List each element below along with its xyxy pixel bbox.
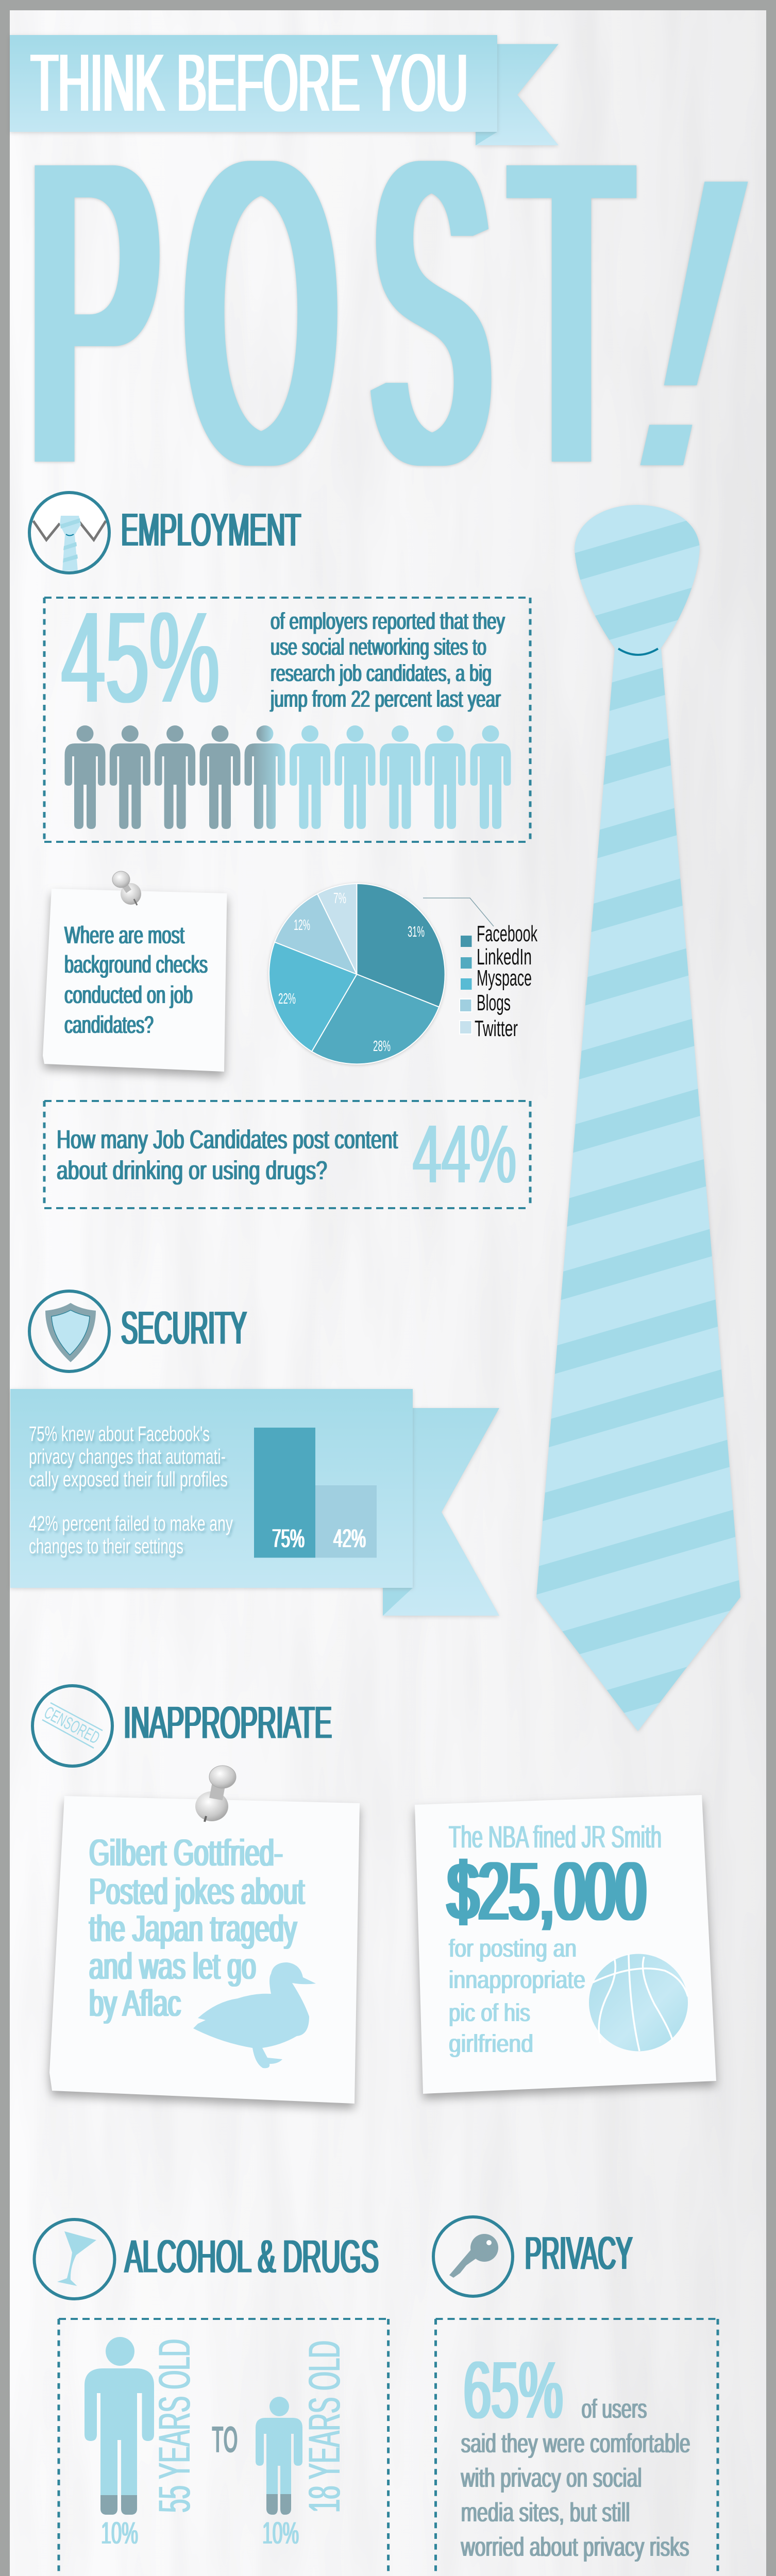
pie values [278, 890, 425, 1055]
sticky note: background checks question [43, 871, 227, 1072]
icon: censored stamp [32, 1686, 112, 1766]
text: for posting: pic of his [449, 1999, 530, 2027]
stat: 65%: 65% [464, 2345, 563, 2435]
heading: alcohol and drugs: ALCOHOL & DRUGS [125, 2231, 379, 2282]
text: of users said: said they were comfortable [461, 2429, 690, 2459]
text: employers use social networking [270, 608, 505, 712]
heading: privacy: PRIVACY [525, 2228, 633, 2279]
legend: Facebook [477, 921, 538, 946]
pie values: 12% [294, 917, 310, 934]
text: gilbert gottfried story [89, 1833, 305, 2024]
panel: 44 percent post about drinking [44, 1101, 530, 1208]
pie values: 28% [373, 1038, 391, 1055]
question text: How many Job Candidates post content [57, 1125, 398, 1154]
stat: $25,000: $25,000 [448, 1845, 646, 1937]
heading: employment: EMPLOYMENT [121, 504, 301, 556]
icon: duck silhouette [193, 1962, 316, 2068]
icon: shirt collar and tie [26, 489, 113, 573]
text: gilbert gottfried story: by Aflac [89, 1983, 181, 2024]
text: employers use social networking: jump from 22 percent last year [270, 686, 501, 712]
text: of users said: worried about privacy risks [461, 2532, 689, 2562]
icon: push pin [112, 871, 141, 905]
text: facebook privacy facts: privacy changes that automati- [29, 1445, 226, 1468]
bar chart: 75 and 42 percent: 42% [333, 1524, 366, 1553]
stat: 44%: 44% [413, 1108, 516, 1200]
text: for posting [449, 1935, 585, 2058]
text: for posting: girlfriend [449, 2030, 533, 2058]
icon: censored stamp: CENSORED [41, 1703, 103, 1748]
section: inappropriate [32, 1686, 332, 1766]
legend [460, 921, 538, 1041]
section: alcohol and drugs [34, 2219, 379, 2299]
person: 18 years old [256, 2397, 302, 2515]
text: employers use social networking: research job candidates, a big [271, 660, 492, 686]
icon: basketball [589, 1954, 688, 2052]
text: facebook privacy facts: 42% percent failed to make any [29, 1512, 233, 1535]
title ribbon: think before you [10, 35, 559, 145]
label: 18 years old: 18 YEARS OLD [300, 2341, 349, 2513]
label: 55 years old: 55 YEARS OLD [150, 2339, 199, 2513]
stat: 45%: 45% [61, 585, 220, 729]
question text [57, 1125, 398, 1185]
legend: LinkedIn [477, 944, 532, 970]
text: employers use social networking: use social networking sites to [271, 634, 486, 660]
text: facebook privacy facts [29, 1422, 233, 1558]
section: employment [26, 489, 301, 573]
leader line [423, 898, 494, 926]
text: gilbert gottfried story: and was let go [89, 1946, 256, 1987]
pictogram: ten people, 45 percent shaded [65, 725, 511, 829]
title: POST!: P [30, 72, 159, 553]
title: POST! [30, 72, 776, 553]
bar chart: 75 and 42 percent [254, 1428, 377, 1558]
text: employers use social networking: of employers reported that they [271, 608, 505, 634]
title: POST!: O [187, 72, 336, 553]
pie chart: social sites for background checks [269, 884, 538, 1064]
text: facebook privacy facts: changes to their settings [29, 1534, 183, 1558]
label: 10%: 10% [262, 2516, 299, 2550]
sticky note: gilbert gottfried [49, 1766, 360, 2104]
text: gilbert gottfried story: Gilbert Gottfried- [89, 1833, 283, 1874]
text: nba fined: The NBA fined JR Smith [449, 1820, 662, 1854]
ribbon panel: security stats [10, 1389, 499, 1616]
panel: alcohol and social media [59, 2319, 389, 2576]
title: POST!: S [374, 72, 488, 553]
text: facebook privacy facts: 75% knew about Facebook's [29, 1422, 210, 1446]
text: for posting: for posting an [449, 1935, 577, 1962]
question text: about drinking or using drugs? [57, 1156, 327, 1185]
person: 55 years old [85, 2337, 154, 2515]
text: gilbert gottfried story: the Japan tragedy [89, 1908, 297, 1950]
icon: key [433, 2217, 513, 2296]
legend: Blogs [477, 990, 511, 1015]
heading: inappropriate: INAPPROPRIATE [124, 1697, 332, 1748]
panel: 45 percent of employers [44, 585, 530, 842]
legend: Myspace [477, 965, 532, 991]
question text: Where are most [64, 921, 184, 948]
text: of users said: of users [581, 2394, 647, 2424]
text: for posting: innappropriate [449, 1967, 585, 1994]
text: facebook privacy facts: cally exposed their full profiles [29, 1467, 228, 1491]
icon: shield [29, 1291, 109, 1371]
panel: privacy 65 percent [436, 2319, 718, 2576]
text: of users said: media sites, but still [461, 2498, 630, 2528]
question text: background checks [64, 951, 208, 978]
bar chart: 75 and 42 percent: 75% [272, 1524, 305, 1553]
label: 10%: 10% [101, 2516, 138, 2550]
question text [64, 921, 208, 1038]
section: privacy [433, 2217, 633, 2296]
label: to: TO [212, 2419, 238, 2461]
heading: security: SECURITY [121, 1302, 247, 1354]
sticky note: jr smith fine [415, 1795, 716, 2094]
text: gilbert gottfried story: Posted jokes about [89, 1871, 305, 1912]
legend: Twitter [475, 1016, 518, 1041]
question text: conducted on job [64, 981, 193, 1008]
title: POST!: T [513, 72, 630, 553]
section: security [29, 1291, 247, 1371]
pie values: 31% [408, 924, 425, 940]
text: of users said: with privacy on social [461, 2463, 642, 2493]
pie values: 7% [333, 890, 346, 907]
icon: push pin [195, 1766, 236, 1822]
icon: tilted cocktail glass [34, 2219, 114, 2299]
big striped tie [535, 504, 742, 1732]
pie values: 22% [278, 991, 296, 1007]
text: of users said [461, 2394, 690, 2562]
question text: candidates? [64, 1011, 154, 1038]
